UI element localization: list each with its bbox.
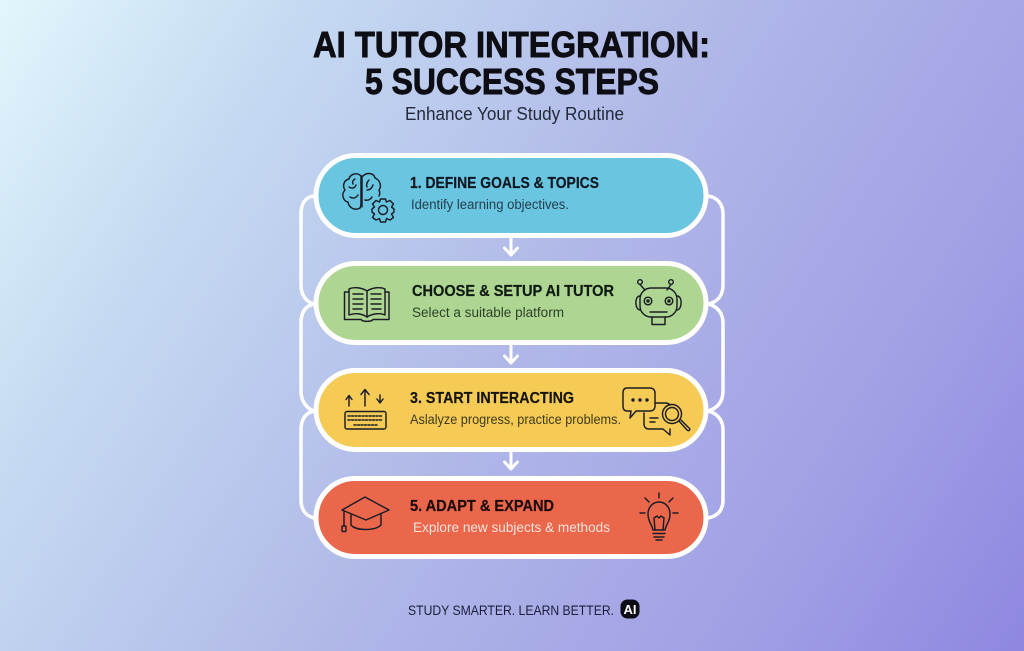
pill: step 4 [316,478,706,556]
text: step 2 description: Select a suitable platform [412,305,564,320]
heading: step 4: 5. ADAPT & EXPAND [410,498,554,515]
footer tagline: STUDY SMARTER. LEARN BETTER. [408,602,614,618]
title: 5 SUCCESS STEPS [365,61,659,102]
icon: robot [636,280,681,324]
text: step 1 description: Identify learning objectives. [411,197,569,212]
panel: step 1 define goals [316,156,706,236]
panel: step 4 adapt and expand [316,478,706,556]
arrow: step 1 to step 2 [504,238,518,255]
pill: step 1 [316,156,706,236]
icon: chat bubbles and magnifier [623,388,690,435]
title: AI TUTOR INTEGRATION: [313,24,710,65]
title [313,24,710,102]
heading: step 3: 3. START INTERACTING [410,390,574,407]
pill: step 2 [316,264,706,342]
icon: AI badge [620,600,640,618]
text: step 3 description: Aslalyze progress, practice problems. [410,412,621,427]
pill: step 3 [316,370,706,450]
icon: AI badge: AI [624,602,636,617]
icon: keyboard with arrows [345,390,386,429]
arrow: step 3 to step 4 [504,453,518,469]
panel: step 3 start interacting [316,370,706,450]
arrow: step 2 to step 3 [504,345,518,363]
icon: graduation cap [342,497,389,532]
side connectors [301,196,723,518]
icon: brain and gear [343,174,394,222]
icon: open book [344,288,389,321]
heading: step 1: 1. DEFINE GOALS & TOPICS [410,175,599,192]
panel: step 2 choose tutor [316,264,706,342]
text: step 4 description: Explore new subjects & methods [413,520,610,535]
subtitle: Enhance Your Study Routine [405,104,624,124]
heading: step 2: CHOOSE & SETUP AI TUTOR [412,283,614,300]
icon: light bulb [640,493,678,540]
